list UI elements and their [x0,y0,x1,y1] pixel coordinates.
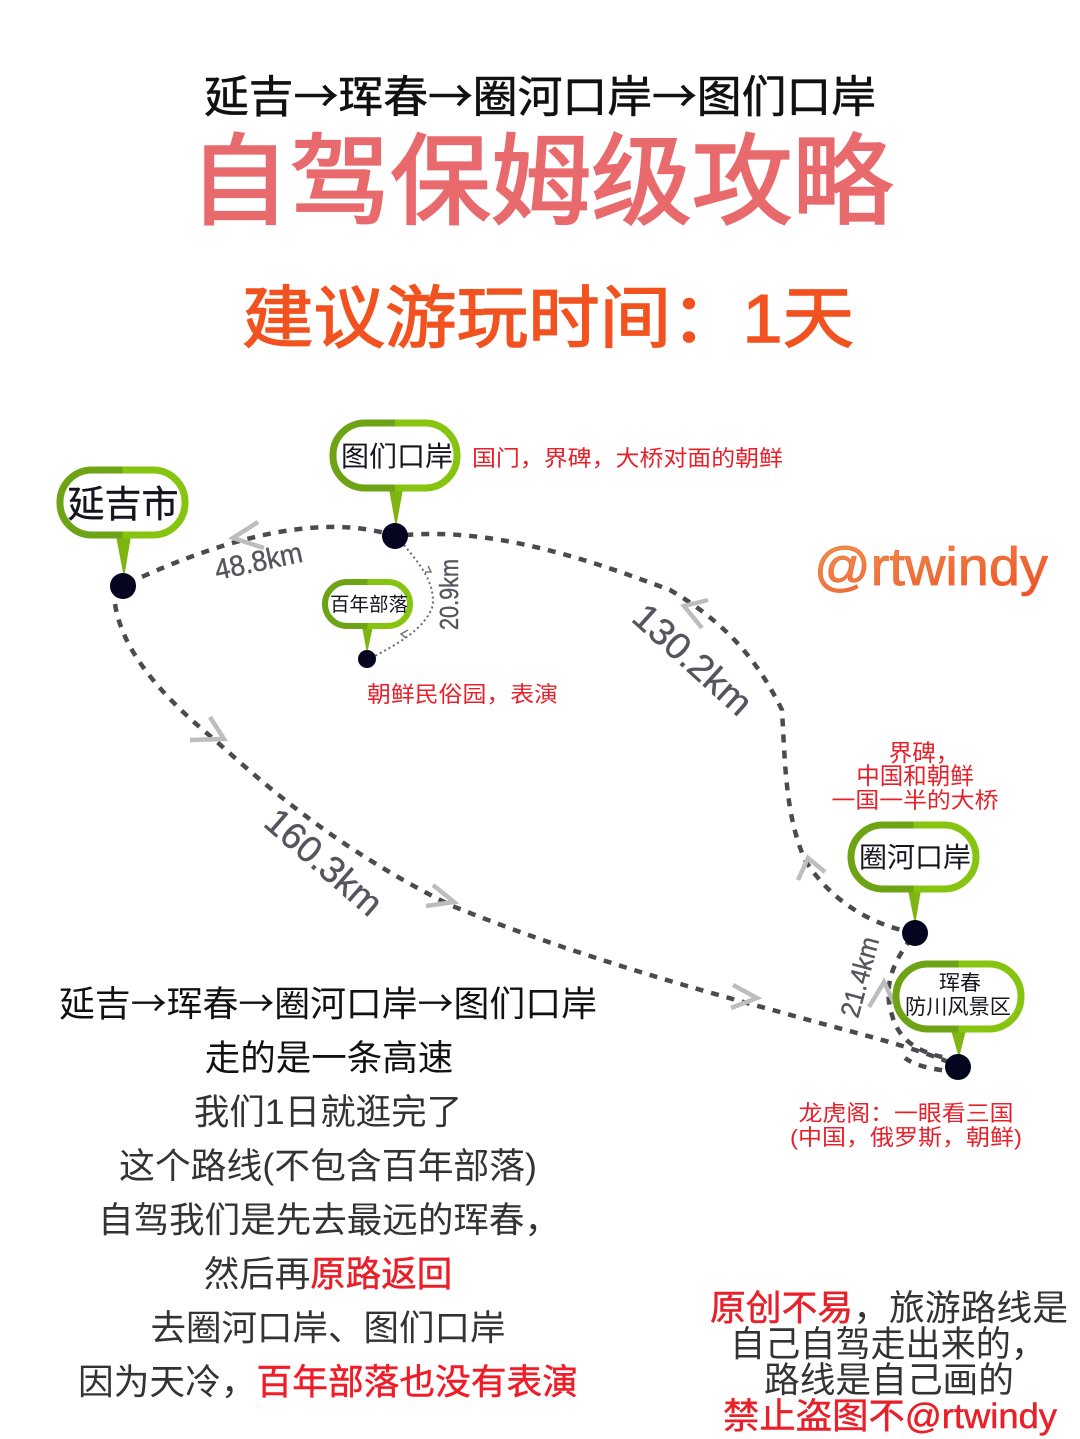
marker: Hunchun Fangchuan: 防川风景区 [905,996,1011,1019]
marker: Hunchun Fangchuan [896,964,1021,1080]
itinerary description: 这个路线(不包含百年部落) [119,1146,537,1186]
copyright statement: 自己自驾走出来的， [730,1324,1046,1364]
itinerary description: 然后再原路返回 [204,1254,452,1294]
distance: 130.2km: 130.2km [625,595,761,724]
copyright statement: 禁止盗图不@rtwindy [723,1396,1057,1436]
copyright statement: 原创不易，旅游路线是 [710,1288,1068,1328]
note: Quanhe: 一国一半的大桥 [832,788,998,813]
route map [60,423,1022,1150]
copyright statement [710,1288,1068,1436]
marker: Bainian village [325,582,410,668]
distance: 160.3km: 160.3km [257,800,391,924]
marker: Bainian village: 百年部落 [330,594,408,616]
note: Quanhe: 界碑， [889,740,959,766]
marker: Tumen port: 图们口岸 [341,441,453,472]
note: Longhu pavilion: 龙虎阁：一眼看三国 [798,1101,1014,1126]
copyright statement: 路线是自己画的 [764,1360,1014,1400]
route: Hunchun to Quanhe [888,940,958,1072]
marker: Yanji: 延吉市 [68,484,178,525]
itinerary description [59,976,597,1402]
marker: Yanji [60,470,185,599]
marker: Quanhe port [851,825,976,946]
route: Quanhe to Tumen to Yanji [122,527,915,933]
route: Yanji to Hunchun [115,604,958,1066]
direction arrows [190,522,894,1008]
itinerary description: 走的是一条高速 [205,1038,453,1078]
marker: Hunchun Fangchuan: 珲春 [939,972,981,995]
note: Longhu pavilion: (中国，俄罗斯，朝鲜) [790,1125,1022,1150]
route subtitle: 延吉→珲春→圈河口岸→图们口岸 [204,61,876,125]
itinerary description: 去圈河口岸、图们口岸 [150,1308,506,1348]
distance: 21.4km: 21.4km [835,934,885,1021]
itinerary description: 自驾我们是先去最远的珲春， [98,1200,560,1240]
note: folk village: 朝鲜民俗园，表演 [367,682,558,707]
marker: Tumen port [333,423,457,549]
author handle: @rtwindy [814,537,1048,597]
note: Quanhe [832,740,998,813]
marker: Quanhe port: 圈河口岸 [859,842,971,873]
route: Tumen to Bainian village [373,545,433,657]
note: Longhu pavilion [790,1101,1022,1150]
distance: 20.9km: 20.9km [434,559,464,630]
distance: 48.8km: 48.8km [212,537,306,587]
note: Quanhe: 中国和朝鲜 [856,763,974,789]
note: Tumen: 国门，界碑，大桥对面的朝鲜 [472,446,783,471]
itinerary description: 因为天冷，百年部落也没有表演 [78,1362,578,1402]
itinerary description: 延吉→珲春→圈河口岸→图们口岸 [59,976,597,1027]
suggested duration: 建议游玩时间：1天 [242,281,854,357]
itinerary description: 我们1日就逛完了 [194,1092,462,1132]
main title: 自驾保姆级攻略 [189,126,893,237]
